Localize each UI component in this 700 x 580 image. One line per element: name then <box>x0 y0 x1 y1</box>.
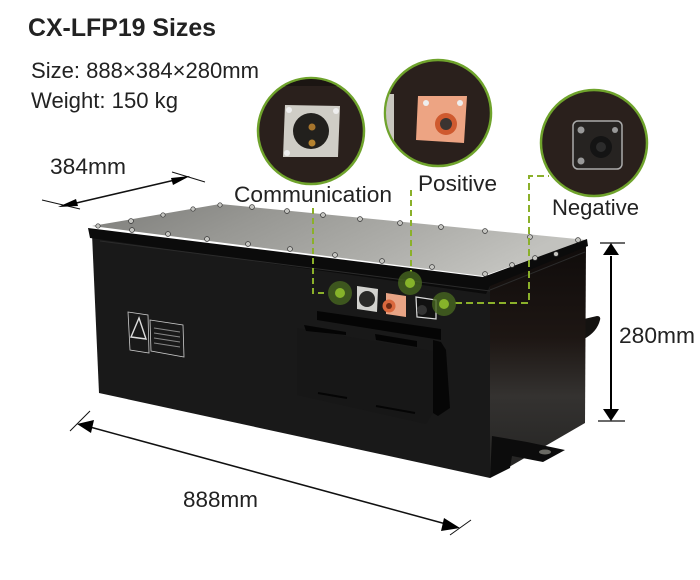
communication port <box>357 286 378 312</box>
dimension: depth 384mm: 384mm <box>50 154 126 179</box>
positive port <box>382 293 406 317</box>
dashed leader: communication <box>313 208 328 293</box>
dimension: length 888mm: 888mm <box>183 487 258 512</box>
callout: negative: Negative <box>552 195 639 220</box>
title: CX-LFP19 Sizes <box>28 14 216 42</box>
callout: negative <box>541 90 647 220</box>
front door plate <box>297 311 450 424</box>
dimension: height 280mm: 280mm <box>619 323 695 348</box>
callout: positive <box>385 60 497 196</box>
size and weight text: Weight: 150 kg <box>31 88 178 113</box>
mounting foot <box>490 436 565 478</box>
size and weight text <box>31 58 259 113</box>
negative port <box>416 297 436 319</box>
dashed leader: negative <box>455 176 549 303</box>
marker dot: negative <box>432 292 456 316</box>
handle on right side <box>584 316 600 339</box>
battery right side <box>486 244 586 478</box>
callout: communication <box>234 78 392 207</box>
size and weight text: Size: 888×384×280mm <box>31 58 259 83</box>
dimension: depth 384mm <box>42 154 205 209</box>
screws on lid <box>96 203 580 276</box>
warning label <box>128 312 184 357</box>
battery illustration <box>88 203 600 478</box>
callout: communication: Communication <box>234 182 392 207</box>
top plate <box>92 204 587 276</box>
callout: positive: Positive <box>418 171 497 196</box>
dimension: length 888mm <box>70 411 471 535</box>
marker dot: positive <box>398 271 422 295</box>
marker dot: communication <box>328 281 352 305</box>
lid rim <box>88 228 588 294</box>
dimension: height 280mm <box>598 243 695 421</box>
dashed leader: positive <box>410 190 412 272</box>
battery front face <box>92 234 490 478</box>
